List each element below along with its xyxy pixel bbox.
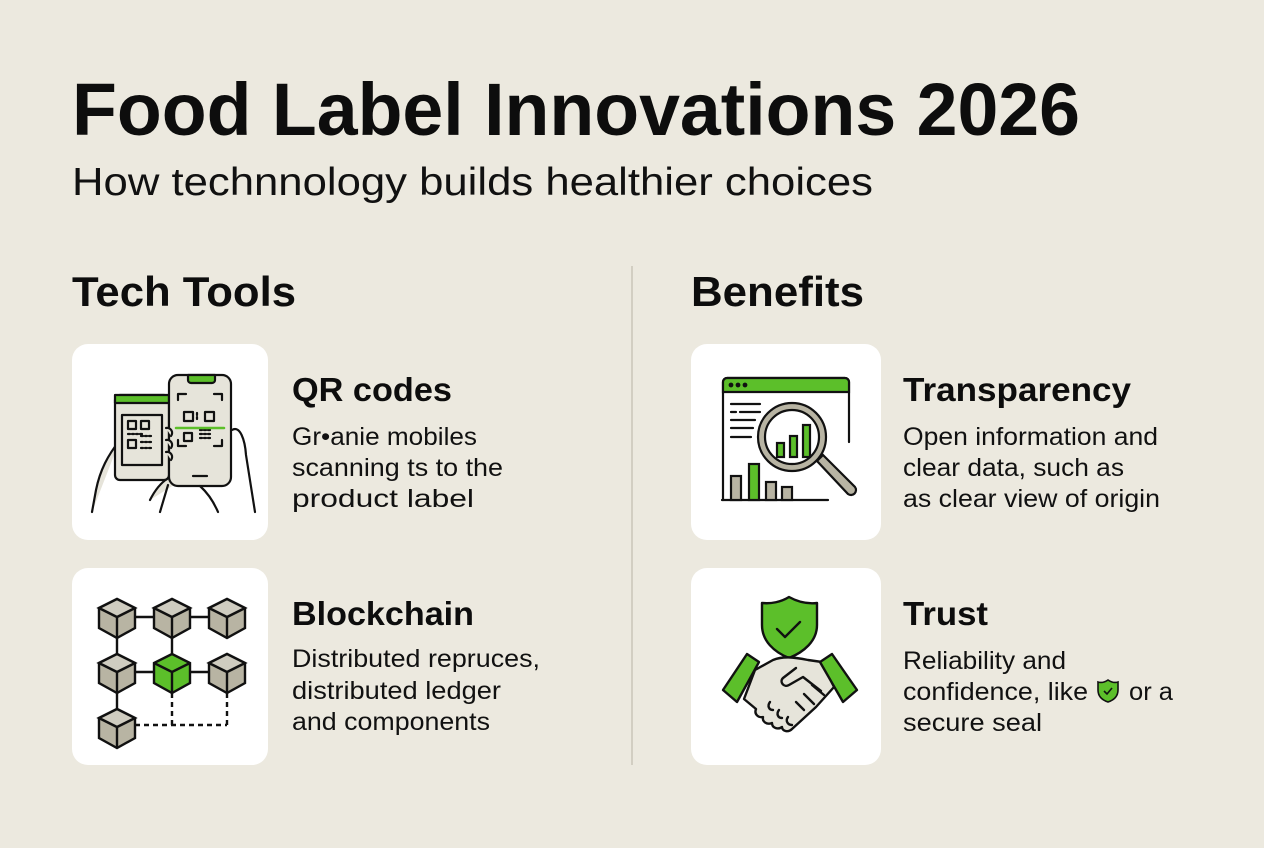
text: Transparency: Open information and — [903, 423, 1158, 451]
text: Trust: Trust — [903, 595, 988, 632]
text: Blockchain — [292, 595, 540, 736]
text: QR codes — [292, 371, 503, 513]
heading: Tech Tools: Tech Tools — [72, 268, 296, 315]
text: QR codes: QR codes — [292, 371, 452, 408]
icon: blockchain cubes — [99, 599, 245, 748]
icon: shield and handshake — [723, 597, 857, 731]
icon: inline shield — [1098, 680, 1118, 702]
text: Transparency: clear data, such as — [903, 454, 1124, 482]
subtitle: How technnology builds healthier choices — [72, 161, 873, 204]
text: Trust: Reliability and — [903, 647, 1066, 675]
title: Food Label Innovations 2026 — [72, 68, 1080, 151]
text: Transparency: Transparency — [903, 371, 1132, 408]
panel: Trust — [691, 568, 881, 765]
heading: Benefits: Benefits — [691, 268, 864, 315]
text: Trust: or a — [1129, 678, 1173, 706]
panel: QR codes — [72, 344, 268, 540]
text: Blockchain: Blockchain — [292, 595, 474, 632]
text: Trust: confidence, like — [903, 678, 1088, 706]
icon: magnifier over data — [722, 378, 856, 500]
text: Blockchain: distributed ledger — [292, 677, 501, 705]
text: Blockchain: Distributed repruces, — [292, 645, 540, 673]
text: Transparency — [903, 371, 1160, 513]
text: Trust — [903, 595, 1173, 737]
text: Transparency: as clear view of origin — [903, 485, 1160, 513]
text: QR codes: product label — [292, 485, 474, 513]
panel: Transparency — [691, 344, 881, 540]
panel: Blockchain — [72, 568, 268, 765]
text: QR codes: scanning ts to the — [292, 454, 503, 482]
text: QR codes: Gr•anie mobiles — [292, 423, 477, 451]
text: Trust: secure seal — [903, 709, 1042, 737]
text: Blockchain: and components — [292, 708, 490, 736]
icon: QR scanning — [92, 375, 255, 512]
